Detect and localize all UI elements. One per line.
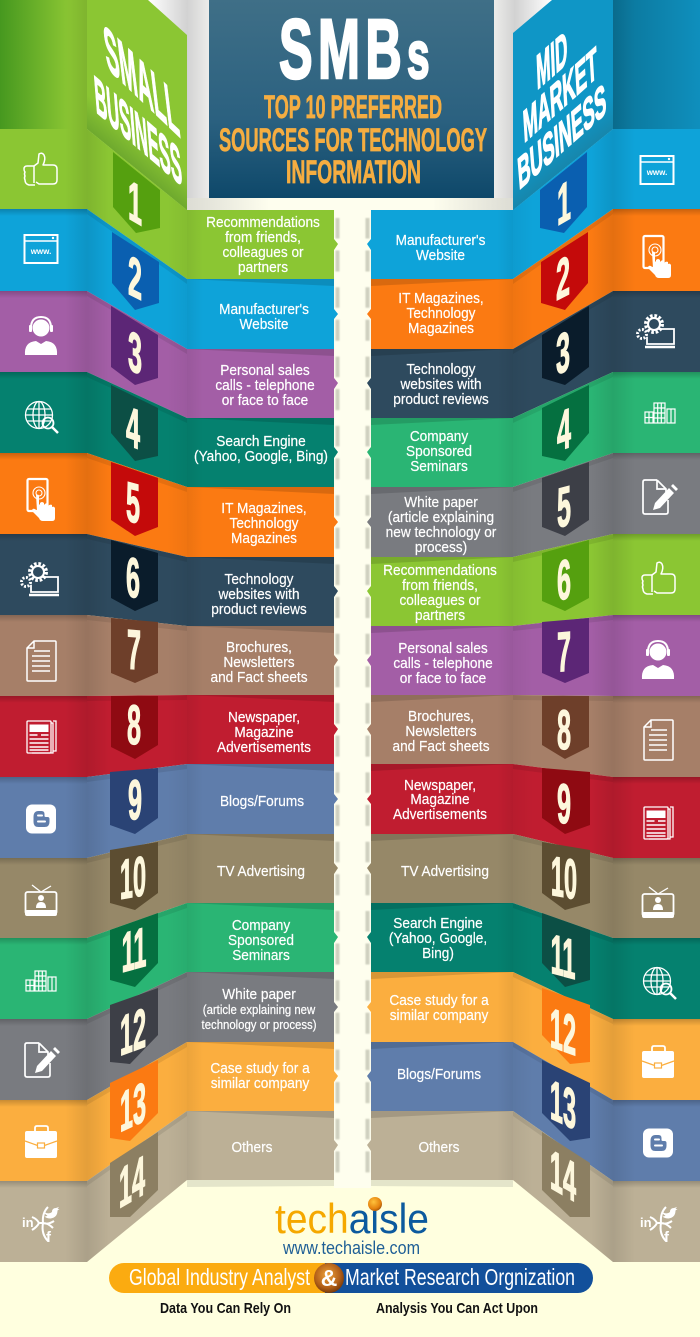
ampersand badge: & bbox=[321, 1265, 337, 1291]
icon: globe search left bbox=[26, 402, 58, 433]
left rank numbers: 1 bbox=[128, 169, 142, 239]
subtitle line 1: TOP 10 PREFERRED bbox=[264, 89, 442, 125]
left column colour bands bbox=[0, 129, 87, 1262]
right label texts: Search Engine bbox=[393, 915, 483, 932]
shaded wall right of title bbox=[494, 0, 552, 210]
right label texts: new technology or bbox=[386, 524, 497, 541]
left label texts: Seminars bbox=[232, 947, 290, 964]
text: BUSINESS bbox=[92, 64, 184, 199]
subtitle line 3: INFORMATION bbox=[286, 154, 421, 190]
left rank numbers: 12 bbox=[120, 997, 146, 1069]
left label texts: websites with bbox=[217, 586, 300, 603]
right rank numbers: 5 bbox=[557, 474, 571, 541]
fold shading and band shadows, left side bbox=[0, 0, 203, 1262]
slogan left: Data You Can Rely On bbox=[160, 1300, 291, 1317]
icon: thumbs up right bbox=[642, 562, 675, 594]
right rank ribbons bbox=[540, 152, 590, 1217]
label top wedges right bbox=[371, 279, 513, 1118]
icon: website right bbox=[640, 156, 674, 184]
tagline pill bbox=[109, 1263, 593, 1293]
icon: headset person right bbox=[642, 641, 674, 679]
label shadow strip right bbox=[366, 218, 370, 1188]
icon: paper and pen left bbox=[25, 1043, 60, 1077]
right rank numbers: 8 bbox=[557, 700, 571, 762]
right label texts: IT Magazines, bbox=[398, 290, 484, 307]
right rank numbers: 4 bbox=[557, 397, 571, 464]
icon: social right bbox=[640, 1207, 678, 1246]
right label texts: Others bbox=[419, 1139, 459, 1156]
icon: tv right bbox=[642, 887, 674, 918]
left label texts: Technology bbox=[229, 515, 299, 532]
icon: headset person left bbox=[25, 317, 57, 355]
icon: social right: f bbox=[664, 1229, 670, 1246]
left label texts: (Yahoo, Google, Bing) bbox=[194, 448, 328, 465]
slogan right: Analysis You Can Act Upon bbox=[376, 1300, 538, 1317]
icon: paper and pen right bbox=[643, 480, 678, 514]
right label texts: Newsletters bbox=[405, 723, 477, 740]
right label texts: and Fact sheets bbox=[392, 738, 490, 755]
right rank numbers: 12 bbox=[550, 997, 576, 1069]
icon: document left bbox=[27, 641, 56, 681]
left rank numbers: 13 bbox=[120, 1070, 146, 1145]
label shadow strip left bbox=[336, 218, 340, 1188]
right label texts: Website bbox=[416, 247, 465, 264]
shaded wall left of title bbox=[148, 0, 209, 210]
icon: newspaper right bbox=[644, 807, 673, 839]
icon: social right: in bbox=[640, 1215, 652, 1230]
right label texts: or face to face bbox=[400, 670, 486, 687]
left label texts: partners bbox=[238, 259, 288, 276]
left label texts: Personal sales bbox=[220, 362, 310, 379]
icon: buildings left bbox=[26, 971, 56, 991]
left rank numbers: 7 bbox=[127, 619, 141, 683]
left label texts: Brochures, bbox=[226, 639, 292, 656]
right rank numbers: 1 bbox=[557, 169, 571, 239]
right label texts: Manufacturer's bbox=[396, 232, 485, 249]
right rank numbers: 13 bbox=[550, 1068, 576, 1143]
left rank numbers: 10 bbox=[120, 845, 146, 912]
right rank numbers: 6 bbox=[557, 549, 571, 613]
website url: www.techaisle.com bbox=[282, 1238, 420, 1258]
icon: tv left bbox=[25, 885, 57, 916]
shadow under title left bbox=[187, 198, 337, 211]
left label texts: Newspaper, bbox=[228, 709, 300, 726]
heading: MID MARKET BUSINESS bbox=[516, 20, 608, 199]
left label texts: Advertisements bbox=[217, 739, 311, 756]
title panel bbox=[209, 0, 494, 198]
right label texts: Blogs/Forums bbox=[397, 1066, 481, 1083]
left label texts: Blogs/Forums bbox=[220, 793, 304, 810]
right label texts: Company bbox=[410, 428, 469, 445]
left label texts: (article explaining new bbox=[203, 1002, 316, 1017]
right label texts: Recommendations bbox=[383, 562, 497, 579]
right label texts: from friends, bbox=[402, 577, 478, 594]
left label texts: White paper bbox=[222, 986, 296, 1003]
right label texts: partners bbox=[415, 607, 465, 624]
icon: blogger right bbox=[643, 1128, 673, 1158]
left label texts: colleagues or bbox=[222, 244, 304, 261]
right label texts: websites with bbox=[399, 376, 482, 393]
subtitle line 2: SOURCES FOR TECHNOLOGY bbox=[219, 122, 487, 158]
icon: gears laptop right bbox=[638, 316, 675, 347]
right label texts bbox=[383, 232, 497, 1156]
left rank numbers: 3 bbox=[128, 319, 142, 388]
icon: social left: f bbox=[46, 1229, 52, 1246]
left rank numbers: 2 bbox=[128, 244, 142, 313]
right rank numbers: 9 bbox=[557, 773, 571, 837]
shadow under title right bbox=[366, 198, 513, 211]
right label texts: product reviews bbox=[393, 391, 489, 408]
right column colour bands bbox=[613, 129, 700, 1262]
left slanted middle bands bbox=[87, 129, 187, 1262]
shadow below last labels left bbox=[187, 1180, 334, 1187]
right label texts: calls - telephone bbox=[393, 655, 493, 672]
right label texts: Magazine bbox=[410, 791, 470, 808]
logo: techaisle: techaisle bbox=[275, 1195, 429, 1242]
right rank numbers bbox=[550, 169, 577, 1215]
right label texts: Seminars bbox=[410, 458, 468, 475]
icon: briefcase left bbox=[25, 1126, 57, 1158]
pill text left: Global Industry Analyst bbox=[129, 1264, 310, 1290]
right label texts: Brochures, bbox=[408, 708, 474, 725]
icon: gears laptop left bbox=[22, 564, 59, 595]
icon: website left: www. bbox=[30, 247, 51, 256]
fold shading, right side bbox=[497, 0, 700, 1262]
right label texts: Magazines bbox=[408, 320, 474, 337]
panel: mid market header column bbox=[513, 0, 700, 210]
right label texts: similar company bbox=[390, 1007, 489, 1024]
left rank numbers: 14 bbox=[119, 1144, 145, 1221]
right label texts: Bing) bbox=[422, 945, 454, 962]
left rank numbers: 9 bbox=[128, 769, 142, 833]
right label texts: (Yahoo, Google, bbox=[389, 930, 487, 947]
left label texts: Company bbox=[232, 917, 291, 934]
right label texts: Technology bbox=[406, 361, 476, 378]
right rank numbers: 11 bbox=[551, 923, 575, 992]
left rank numbers: 11 bbox=[122, 916, 146, 985]
left label texts: or face to face bbox=[222, 392, 308, 409]
icon: buildings right bbox=[645, 403, 675, 423]
right slanted middle bands bbox=[513, 129, 613, 1262]
icon: website right: www. bbox=[646, 168, 667, 177]
left label texts: Newsletters bbox=[223, 654, 295, 671]
panel: small business header column bbox=[0, 0, 187, 210]
left label texts: Manufacturer's bbox=[219, 301, 309, 318]
left label texts: Technology bbox=[224, 571, 294, 588]
left rank numbers bbox=[119, 169, 146, 1221]
left label texts: from friends, bbox=[225, 229, 301, 246]
left label texts: Case study for a bbox=[210, 1060, 310, 1077]
right rank numbers: 3 bbox=[556, 319, 570, 388]
right label texts: (article explaining bbox=[388, 509, 494, 526]
icon: website left bbox=[24, 235, 58, 263]
icon: briefcase right bbox=[642, 1046, 674, 1078]
right label texts: White paper bbox=[404, 494, 478, 511]
left rank ribbons bbox=[110, 152, 160, 1217]
left rank numbers: 4 bbox=[126, 395, 140, 462]
left label texts: technology or process) bbox=[202, 1017, 316, 1032]
heading: SMALL BUSINESS bbox=[92, 9, 184, 199]
left label bands bbox=[187, 210, 338, 1180]
left rank numbers: 6 bbox=[126, 547, 140, 611]
right rank numbers: 14 bbox=[550, 1138, 576, 1215]
left label texts: Magazines bbox=[231, 530, 297, 547]
left rank numbers: 5 bbox=[126, 470, 140, 537]
ampersand badge bbox=[314, 1263, 344, 1293]
text: SMALL bbox=[100, 9, 183, 152]
left label texts: product reviews bbox=[211, 601, 307, 618]
left label texts: Recommendations bbox=[206, 214, 320, 231]
pill text right: Market Research Orgnization bbox=[345, 1264, 575, 1290]
left label texts: Sponsored bbox=[228, 932, 294, 949]
right label bands bbox=[367, 210, 513, 1180]
icon: social left bbox=[22, 1207, 60, 1246]
label top wedges left bbox=[187, 279, 334, 1118]
right rank numbers: 7 bbox=[557, 621, 571, 685]
icon: tablet hand right bbox=[644, 236, 671, 278]
left label texts: Others bbox=[232, 1139, 272, 1156]
right label texts: Advertisements bbox=[393, 806, 487, 823]
left label texts: Website bbox=[239, 316, 289, 333]
icon: document right bbox=[644, 720, 673, 760]
right rank numbers: 2 bbox=[556, 244, 570, 313]
right label texts: Technology bbox=[406, 305, 476, 322]
icon: thumbs up left bbox=[24, 153, 57, 185]
center gutter bbox=[334, 198, 371, 1188]
shadow below last labels right bbox=[371, 1180, 513, 1187]
icon: tablet hand left bbox=[28, 479, 55, 521]
right label texts: Sponsored bbox=[406, 443, 472, 460]
left label texts: calls - telephone bbox=[215, 377, 315, 394]
left label texts: TV Advertising bbox=[217, 863, 305, 880]
right label texts: process) bbox=[415, 539, 467, 556]
right label texts: Case study for a bbox=[389, 992, 489, 1009]
right label texts: TV Advertising bbox=[401, 863, 489, 880]
icon: social left: in bbox=[22, 1215, 34, 1230]
left rank numbers: 8 bbox=[127, 695, 141, 757]
icon: newspaper left bbox=[27, 721, 56, 753]
title: SMBs: SMBs bbox=[279, 2, 435, 96]
left label texts: and Fact sheets bbox=[210, 669, 308, 686]
icon: blogger left bbox=[26, 804, 56, 834]
left label texts: Magazine bbox=[234, 724, 294, 741]
right label texts: colleagues or bbox=[399, 592, 481, 609]
left label texts bbox=[194, 214, 328, 1156]
right rank numbers: 10 bbox=[551, 845, 577, 912]
right label texts: Personal sales bbox=[398, 640, 488, 657]
left label texts: similar company bbox=[211, 1075, 310, 1092]
left label texts: Search Engine bbox=[216, 433, 306, 450]
icon: globe search right bbox=[644, 968, 676, 999]
right label texts: Newspaper, bbox=[404, 777, 476, 794]
left label texts: IT Magazines, bbox=[221, 500, 307, 517]
